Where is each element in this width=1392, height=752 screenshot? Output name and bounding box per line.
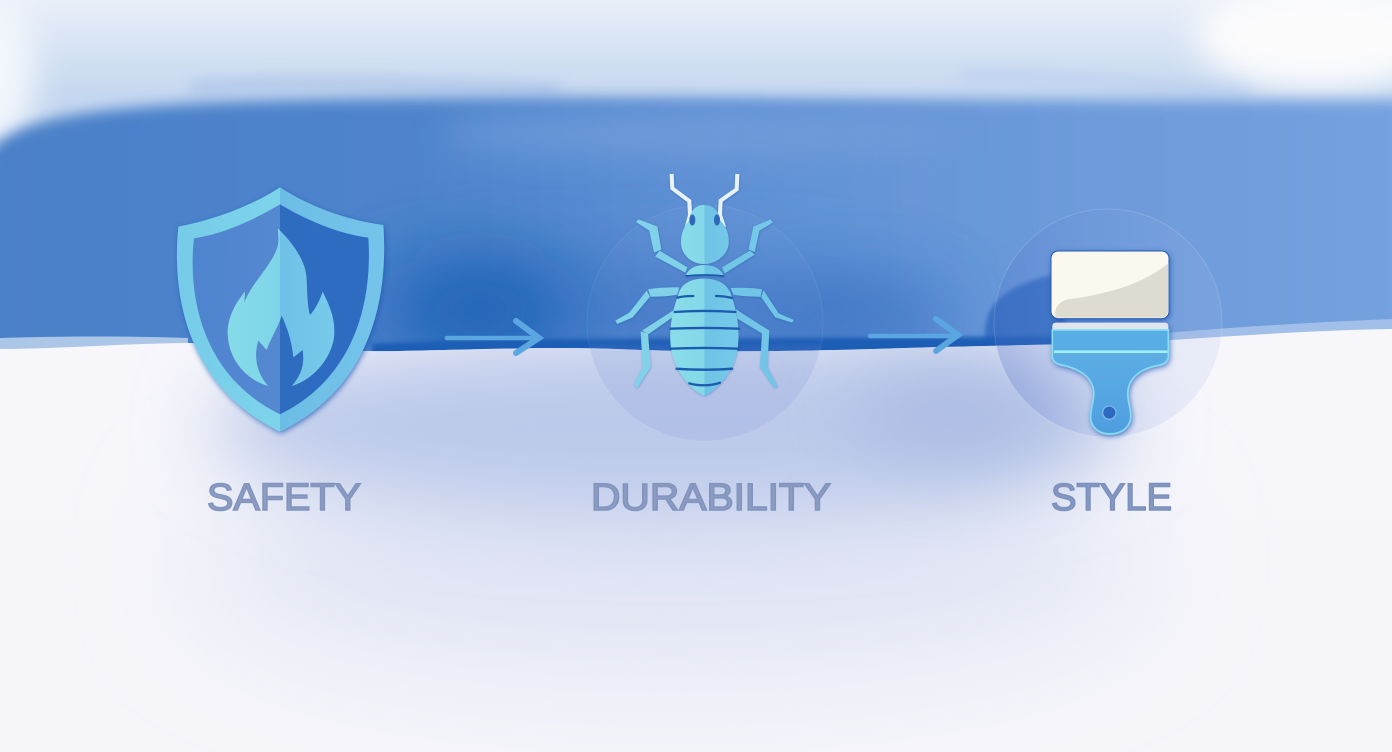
termite legs bbox=[615, 219, 794, 388]
brush ferrule and handle bbox=[1052, 330, 1168, 434]
icon: fire shield bbox=[177, 187, 384, 432]
termite thorax bbox=[686, 265, 723, 275]
label: style: STYLE bbox=[1051, 477, 1172, 519]
termite eyes bbox=[689, 214, 720, 226]
termite head bbox=[681, 205, 729, 264]
termite abdomen bbox=[670, 279, 739, 396]
background: pale sky wash bbox=[0, 0, 1392, 360]
icon: termite bbox=[615, 174, 794, 396]
icon: paint brush bbox=[1051, 251, 1169, 434]
brush ferrule band bbox=[1053, 331, 1167, 351]
icon: flame bbox=[228, 228, 334, 386]
brush handle hole bbox=[1103, 406, 1116, 419]
decorative circle behind paint brush bbox=[994, 209, 1222, 437]
decorative circle behind termite bbox=[587, 205, 823, 441]
arrow: safety to durability bbox=[447, 321, 539, 353]
brush metal cap bbox=[1052, 323, 1168, 331]
background: lower white paper with lavender glow bbox=[0, 329, 1392, 695]
background: blue paint band bbox=[0, 97, 1392, 365]
label: durability: DURABILITY bbox=[591, 477, 831, 519]
brush bristles bbox=[1051, 251, 1169, 319]
termite abdomen segments bbox=[670, 275, 739, 385]
arrow: durability to style bbox=[870, 319, 958, 351]
brush bristle shading bbox=[1055, 263, 1168, 318]
termite antennae bbox=[672, 174, 737, 226]
label: safety: SAFETY bbox=[207, 477, 361, 519]
